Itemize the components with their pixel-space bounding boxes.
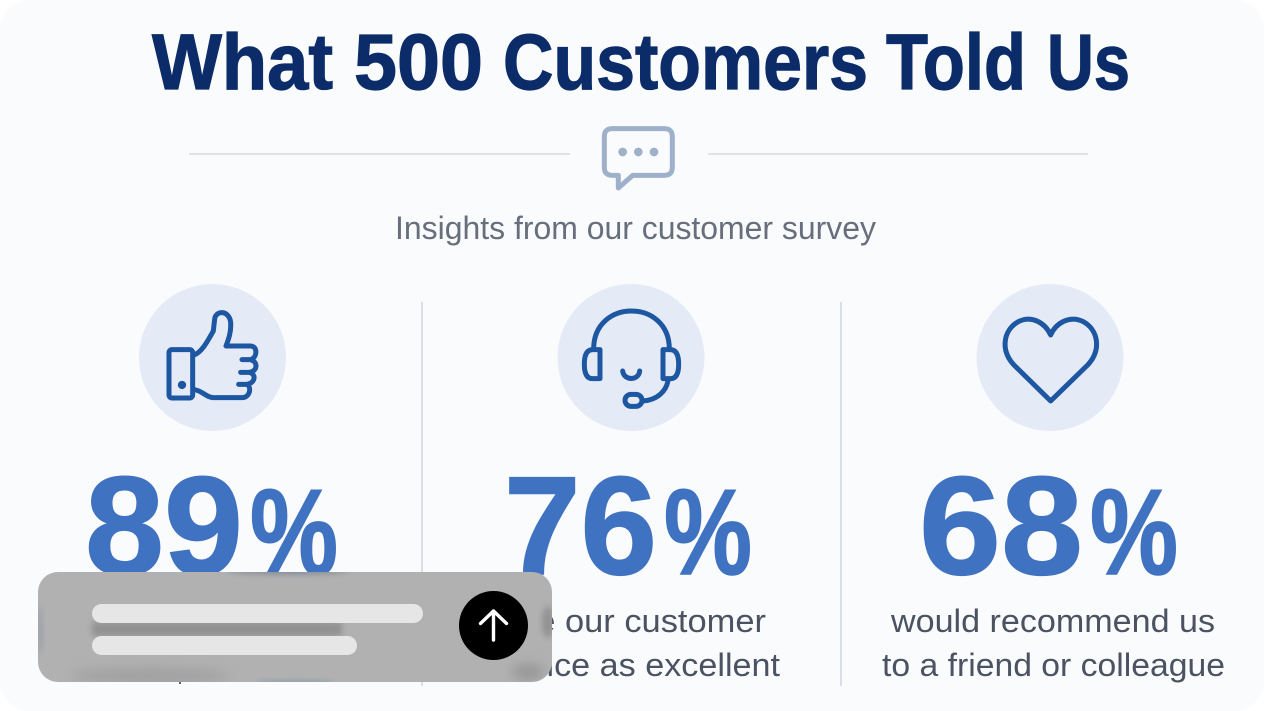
title: Told — [886, 17, 1026, 106]
header divider with speech bubble — [189, 129, 1088, 188]
title: Customers — [503, 17, 868, 106]
stat: 89%: % — [250, 464, 338, 600]
placeholder bars — [92, 604, 423, 623]
panel: customer service — [482, 284, 780, 683]
title: Us — [1047, 17, 1130, 106]
stat: 68%: 68 — [919, 447, 1083, 604]
stat label — [482, 603, 780, 683]
descender peeking below overlay — [179, 682, 181, 684]
title: 500 — [354, 17, 483, 106]
icon: thumbs up — [139, 284, 286, 431]
stat: 76%: 76 — [504, 447, 657, 604]
stat label: to a friend or colleague — [882, 647, 1225, 683]
stat: 76% — [504, 447, 752, 604]
stat: 68%: % — [1090, 464, 1178, 600]
stat: 89%: 89 — [85, 447, 243, 604]
stat: 68% — [919, 447, 1178, 604]
icon: heart — [976, 284, 1124, 431]
title — [152, 17, 1130, 106]
stat label: rate our customer — [496, 603, 766, 639]
stat: 89% — [85, 447, 338, 604]
blurred backdrop — [37, 568, 554, 685]
title: What — [152, 17, 333, 106]
subtitle: Insights from our customer survey — [395, 210, 876, 246]
icon: up arrow button — [459, 591, 528, 660]
stat label — [882, 603, 1225, 683]
stat: 76%: % — [664, 464, 752, 600]
icon: headset — [558, 284, 704, 431]
icon: speech bubble — [604, 129, 672, 188]
stat label: would recommend us — [890, 603, 1215, 639]
panel: satisfaction — [85, 284, 338, 604]
panel: recommendation — [882, 284, 1225, 683]
stat label: service as excellent — [482, 647, 780, 683]
column dividers — [422, 302, 841, 686]
overlay card — [37, 568, 554, 685]
